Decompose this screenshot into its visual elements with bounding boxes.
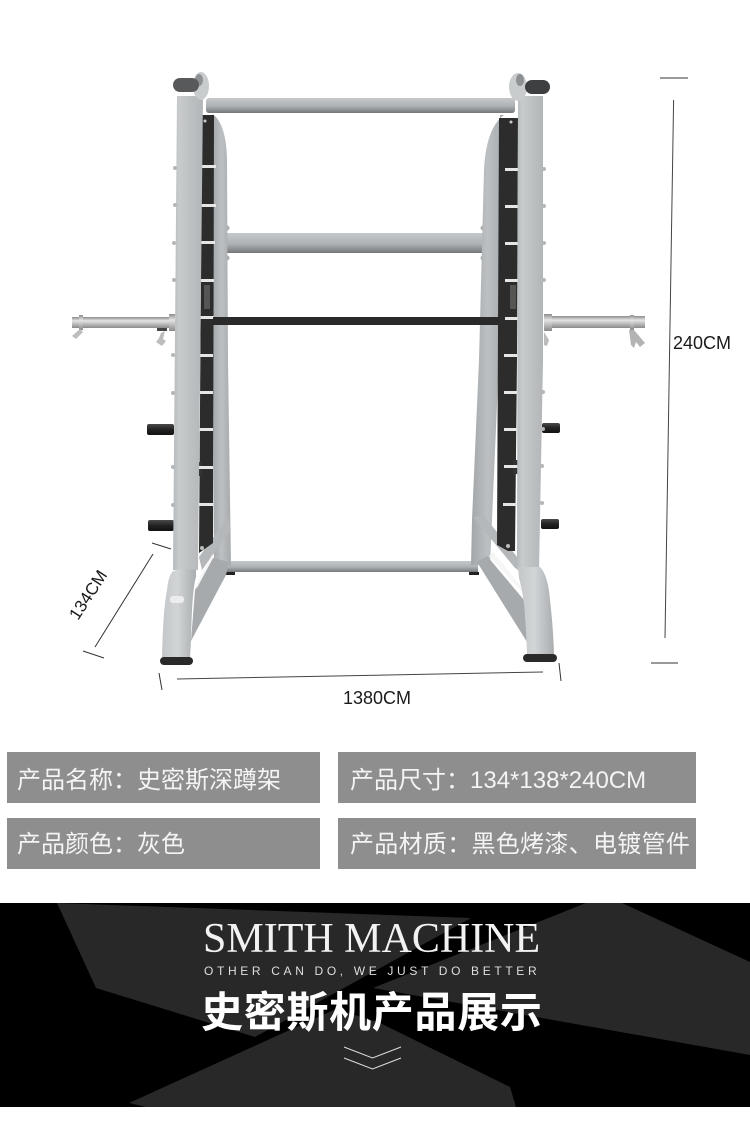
icon: double chevron down [344, 1046, 402, 1070]
info box: product size: 产品尺寸：134*138*240CM [350, 767, 646, 794]
info box: product size [338, 752, 696, 803]
info box: product material: 产品材质：黑色烤漆、电镀管件 [350, 831, 690, 858]
dimension: width 1380CM [159, 663, 561, 708]
right black track with rungs [497, 118, 519, 551]
left top cap and pulley [173, 72, 209, 100]
left weight pegs [147, 424, 174, 531]
info box: product name [7, 752, 320, 803]
info box: product material [338, 818, 696, 869]
right foot [518, 567, 557, 662]
dimension: width 1380CM: 1380CM [343, 688, 411, 708]
dimension: height 240CM: 240CM [673, 333, 731, 353]
right main upright [517, 96, 546, 570]
banner title English: SMITH MACHINE [203, 916, 540, 962]
info box: product colour [7, 818, 320, 869]
left black track with rungs [197, 115, 216, 553]
black banner [0, 903, 750, 1107]
product photo: smith machine with dimension lines [65, 72, 731, 708]
left barbell sleeve [72, 314, 175, 346]
banner background polygons [57, 903, 750, 1107]
barbell shaft [213, 317, 499, 325]
left main upright [171, 96, 203, 570]
banner title Chinese: 史密斯机产品展示 [201, 989, 543, 1036]
right weight pegs [541, 423, 560, 529]
middle crossbar [224, 226, 486, 260]
info box: product name: 产品名称：史密斯深蹲架 [17, 767, 281, 794]
right barbell sleeve [544, 314, 645, 348]
info box: product colour: 产品颜色：灰色 [17, 831, 185, 858]
left foot [160, 569, 196, 665]
dimension: depth 134CM [65, 543, 171, 658]
banner tagline: OTHER CAN DO, WE JUST DO BETTER [204, 964, 540, 978]
right top cap and pulley [509, 73, 550, 101]
bottom crossbar [225, 561, 479, 575]
dimension: depth 134CM: 134CM [65, 567, 111, 623]
left rear upright and braces [191, 114, 231, 641]
top crossbar [206, 98, 515, 113]
dimension: height 240CM [651, 78, 731, 663]
right rear upright and braces [471, 115, 527, 642]
